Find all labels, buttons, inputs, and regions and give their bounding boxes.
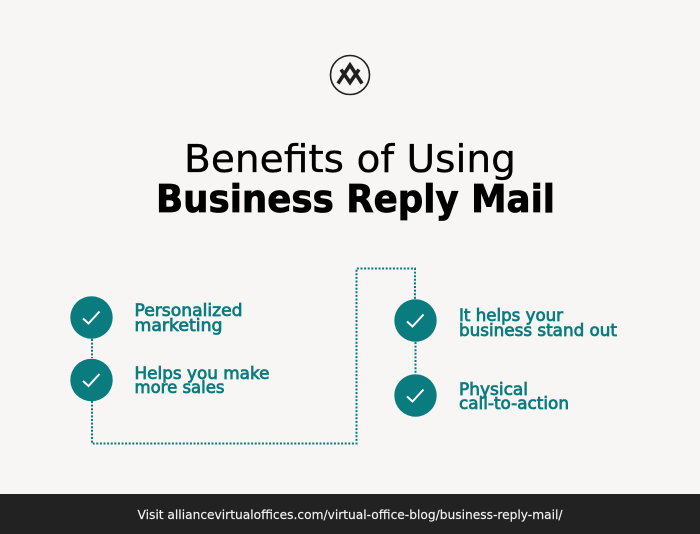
item: Helps you make more sales [70,359,270,401]
item: Helps you make more sales: Helps you make [134,364,270,383]
item: Physical call-to-action: Physical [459,380,528,399]
item: Personalized marketing [70,296,242,339]
footer bar: Visit alliancevirtualoffices.com/virtual-office-blog/business-reply-mail/ [138,507,563,522]
title [156,137,555,221]
dotted connector line [92,268,416,444]
footer bar [0,494,700,534]
title: Business Reply Mail [156,177,555,221]
item: Personalized marketing: marketing [134,316,222,335]
item: Helps you make more sales: more sales [134,378,224,397]
item: Physical call-to-action [394,374,569,417]
item: It helps your business stand out: It helps your [459,306,563,325]
item: Physical call-to-action: call-to-action [459,394,569,413]
item: It helps your business stand out [394,299,618,342]
item: Personalized marketing: Personalized [134,301,242,320]
icon: logo [330,56,370,94]
item: It helps your business stand out: business stand out [459,321,618,340]
title: Benefits of Using [184,137,516,181]
